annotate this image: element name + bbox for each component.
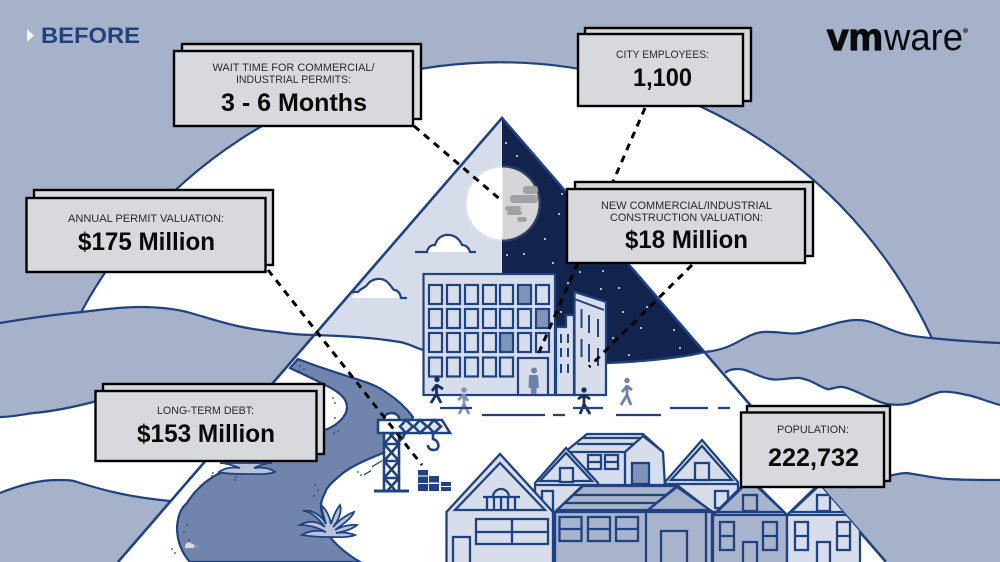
icon: crane [374,413,450,491]
icon: cloud right [415,235,476,252]
lower left hill [0,480,170,562]
person in doorway [528,368,539,394]
dashed connector lines [268,108,692,465]
icon: coin stacks [418,470,451,491]
street dashes [440,408,730,415]
vmware logo: ware [883,17,963,59]
heading: before: BEFORE [41,23,140,48]
callout: annual permit valuation: $175 Million [78,228,215,256]
callout: new construction valuation: CONSTRUCTION VALUATION: [610,212,763,224]
callout: wait time for permits: WAIT TIME FOR COMMERCIAL/ [212,62,375,74]
callout: wait time for permits [174,44,421,126]
callout: city employees: 1,100 [633,64,692,92]
river bank details [171,365,382,554]
night stars [505,142,681,356]
icon: plant small [219,463,275,474]
callout: new construction valuation: $18 Million [625,226,748,254]
lower right hill [823,473,1000,562]
front house right dark [713,486,787,562]
triangle scene: day and night sky [118,118,886,562]
back house left [535,448,598,512]
callout: long-term debt [96,384,324,461]
callout: new construction valuation [567,182,813,263]
callout: population [741,406,890,487]
back house right [665,440,738,512]
callout: new construction valuation: NEW COMMERCIAL/INDUSTRIAL [601,200,772,212]
person walking 3 [578,387,590,414]
houses row [446,434,860,562]
vmware logo: vm [827,17,883,59]
front house left [446,454,553,562]
callout: population: POPULATION: [777,424,849,436]
callout: long-term debt: $153 Million [137,420,275,448]
front house centre [555,485,712,562]
building windows [429,285,549,395]
left hill [0,307,315,425]
right hill [705,320,1000,405]
callout: long-term debt: LONG-TERM DEBT: [157,405,254,417]
callout: city employees [578,28,751,106]
front house far right [787,480,860,562]
callout: annual permit valuation [26,190,273,272]
callout: wait time for permits: 3 - 6 Months [221,89,367,117]
callout: population: 222,732 [768,444,859,472]
river [177,359,413,562]
rock [185,542,199,548]
main office building [424,274,555,395]
tall right building [574,292,606,395]
callout: city employees: CITY EMPLOYEES: [616,49,709,61]
person walking 2 [458,387,469,414]
back house top [565,434,665,486]
person walking 1 [431,377,443,403]
icon: cloud left [352,279,407,298]
callout: wait time for permits: INDUSTRIAL PERMITS: [236,74,351,86]
callout: annual permit valuation: ANNUAL PERMIT VALUATION: [68,213,224,225]
icon: moon [464,165,541,242]
vmware logo [827,17,968,59]
icon: plant large [300,505,357,537]
person walking 4 [621,378,632,405]
narrow middle building [556,315,574,395]
